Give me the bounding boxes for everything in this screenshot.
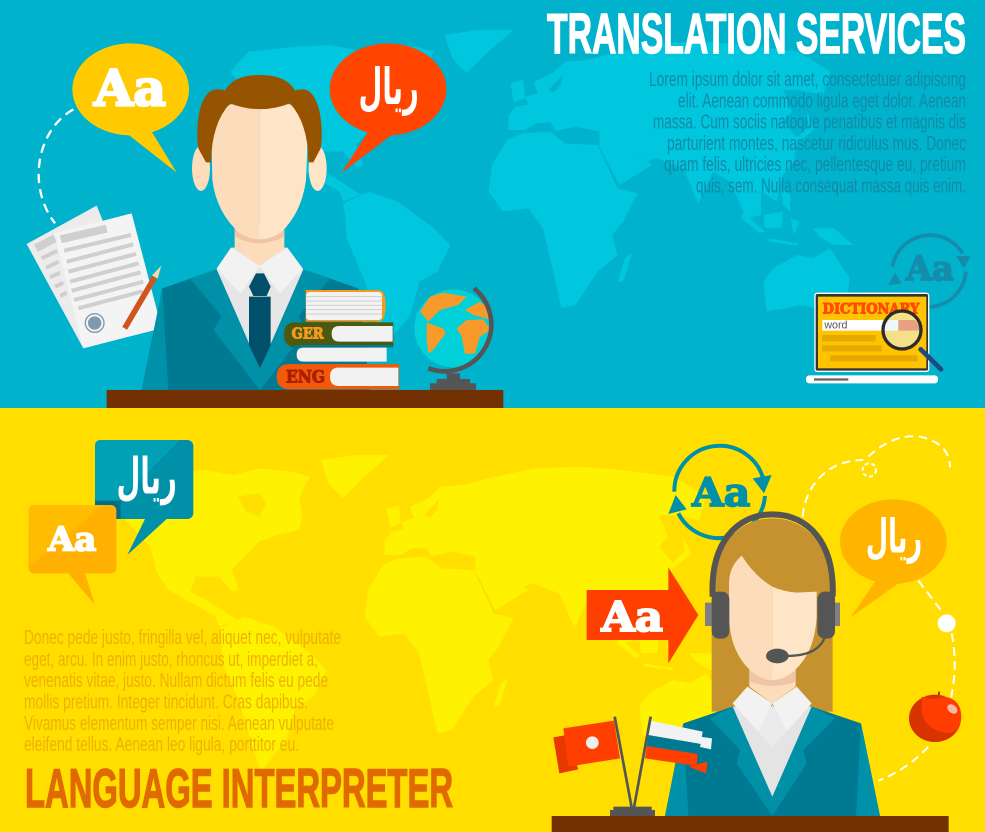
icon: documents with seal and pencil [27,206,162,348]
world map: yellow panel [106,455,757,773]
text block: donec paragraph: mollis pretium. Integer tincidunt. Cras dapibus. [24,692,308,714]
arrow: red Aa arrow [587,567,698,663]
woman: jacket [665,707,880,816]
panel: translation services background [0,0,985,409]
text block: donec paragraph [24,627,341,756]
man: ears [192,146,327,191]
icon: laptop dictionary [806,293,938,383]
flag stand [610,807,655,816]
icon: magnifying glass [883,311,941,369]
figure group: yellow panel bubbles [29,440,193,605]
text block: donec paragraph: venenatis vitae, justo. Nullam dictum felis eu pede [24,670,328,692]
dashed path: upper loop [803,436,950,517]
dashed path: lower route with dot [878,581,956,781]
icon: laptop dictionary: DICTIONARY [823,301,920,317]
man: jacket [142,269,370,390]
speech bubble: teal Arabic [95,440,193,555]
icon: laptop dictionary: word [823,320,848,332]
icon: translate cycle Aa: Aa [691,470,750,516]
arrow: red Aa arrow: Aa [600,592,663,641]
woman: neck [749,667,796,703]
text block: donec paragraph: eleifend tellus. Aenean leo ligula, porttitor eu. [24,734,299,756]
figure group: blue panel right icons [806,235,971,383]
desk [552,816,949,832]
icon: red flag [553,711,632,807]
woman: shirt and collar [733,687,812,797]
books stack [277,290,399,389]
icon: apple [909,692,961,742]
books stack: GER [292,325,324,342]
man: neck [235,223,284,266]
speech bubble: red Arabic [330,43,446,173]
text block: donec paragraph: eget, arcu. In enim justo, rhoncus ut, imperdiet a, [24,649,318,671]
speech bubble: orange Aa [29,505,116,605]
man: face [212,100,307,239]
speech bubble: orange Arabic: ريال [866,509,922,564]
text block: lorem ipsum paragraph [649,69,966,198]
woman: hair back [712,518,833,712]
speech bubble: red Arabic: ريال [359,58,419,116]
speech bubble: yellow Aa [72,43,189,173]
world map: blue panel [230,30,881,348]
speech bubble: yellow Aa: Aa [93,58,166,117]
speech bubble: orange Arabic [840,499,947,617]
icon: tricolour flag [634,717,712,807]
man: shirt [217,248,303,368]
text block: donec paragraph: Donec pede justo, fringilla vel, aliquet nec, vulputate [24,627,341,649]
man: tie [249,273,271,368]
speech bubble: teal Arabic: ريال [117,447,177,506]
text block: donec paragraph: Vivamus elementum semper nisi. Aenean vulputate [24,713,334,735]
panel: language interpreter background [0,408,985,832]
icon: translate cycle Aa [888,235,971,307]
icon: translate cycle Aa [668,446,772,538]
icon: dashed connector line [39,109,73,223]
icon: headset [705,514,840,663]
man: collar [217,248,303,293]
title: language interpreter: LANGUAGE INTERPRETER [25,757,453,819]
books stack: ENG [286,367,325,387]
desk [107,390,503,408]
speech bubble: orange Aa: Aa [47,520,96,558]
figure group: blue panel left scene [27,43,503,408]
man: hair [197,75,322,162]
icon: globe [414,288,492,390]
icon: translate cycle Aa: Aa [905,249,954,288]
woman: face [729,556,817,680]
figure group: yellow panel right scene [552,436,961,832]
